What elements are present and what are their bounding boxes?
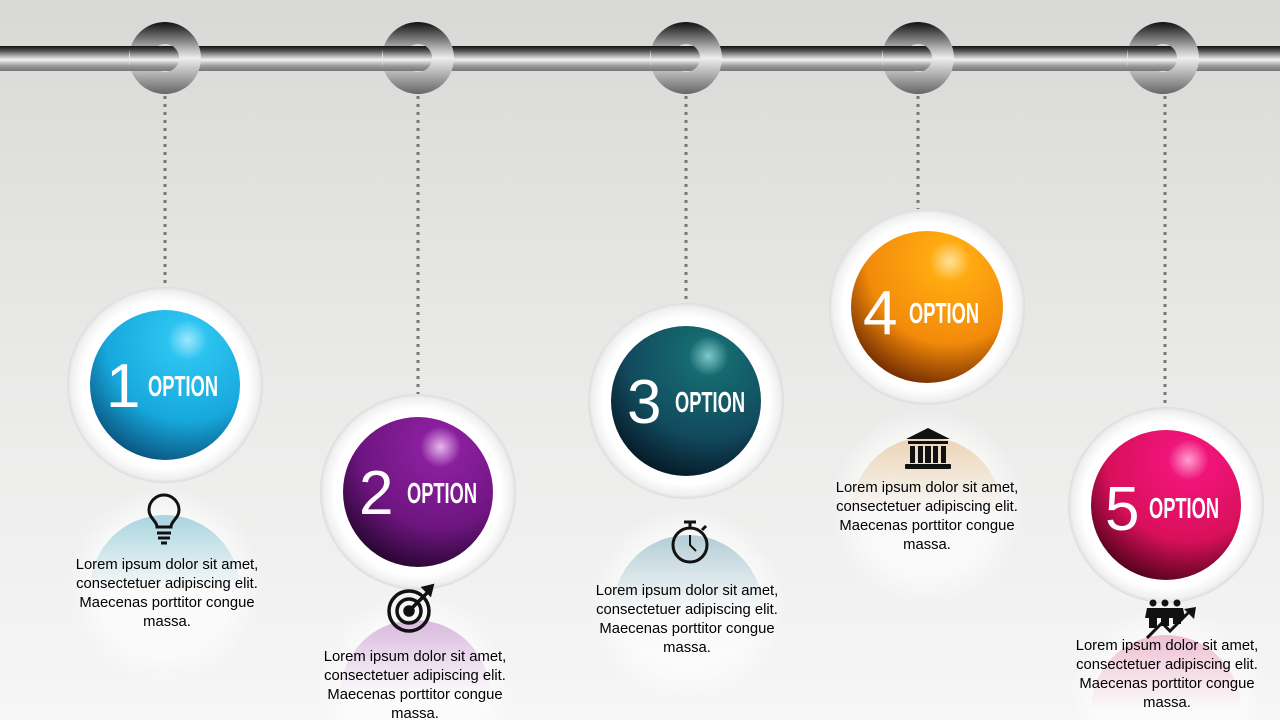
text 2: Maecenas porttitor congue [327,687,503,703]
bubble 1 [67,287,263,483]
bubble 5 [1068,407,1264,603]
reflection 4 [829,409,1025,605]
bubble 2: OPTION [407,478,477,510]
option 4 [829,22,1025,605]
text 1: Lorem ipsum dolor sit amet, [76,557,258,573]
ring 5 [1127,22,1199,94]
text 5: Lorem ipsum dolor sit amet, [1076,638,1258,654]
bubble 3: 3 [627,368,661,437]
option 3 [588,22,786,703]
reflection 5 [1068,607,1264,720]
bubble 2: 2 [359,459,393,528]
text 1: Maecenas porttitor congue [79,595,255,611]
hanging rail bar [0,46,1280,71]
text 1: massa. [143,614,191,630]
text 3: Lorem ipsum dolor sit amet, [596,583,778,599]
bubble 1: 1 [106,352,140,421]
text 3: consectetuer adipiscing elit. [596,602,778,618]
reflection 3 [590,507,786,703]
bubble 4 [829,209,1025,405]
text 4: Maecenas porttitor congue [839,518,1015,534]
reflection 1 [67,487,263,683]
option 5 [1068,22,1264,720]
option 1 [67,22,263,683]
icon: target [389,586,432,631]
bubble 2 [320,394,516,590]
ring 2 [382,22,454,94]
text 4: Lorem ipsum dolor sit amet, [836,480,1018,496]
reflection 2 [317,592,513,720]
text 1: consectetuer adipiscing elit. [76,576,258,592]
bubble 3: OPTION [675,387,745,419]
text 4: massa. [903,537,951,553]
text 5: Maecenas porttitor congue [1079,676,1255,692]
text 5: consectetuer adipiscing elit. [1076,657,1258,673]
text 4: consectetuer adipiscing elit. [836,499,1018,515]
bubble 3 [588,303,784,499]
ring 1 [129,22,201,94]
icon: light bulb [149,495,179,543]
option 2 [317,22,516,720]
text 2: consectetuer adipiscing elit. [324,668,506,684]
text 2: Lorem ipsum dolor sit amet, [324,649,506,665]
text 3: massa. [663,640,711,656]
bubble 4: OPTION [909,298,979,330]
bubble 1: OPTION [148,371,218,403]
text 5: massa. [1143,695,1191,711]
text 3: Maecenas porttitor congue [599,621,775,637]
bubble 5: OPTION [1149,493,1219,525]
icon: people growth [1145,600,1196,638]
bubble 4: 4 [863,279,897,348]
ring 4 [882,22,954,94]
icon: bank building [905,428,951,469]
ring 3 [650,22,722,94]
icon: stopwatch [673,522,707,562]
bubble 5: 5 [1105,475,1139,544]
